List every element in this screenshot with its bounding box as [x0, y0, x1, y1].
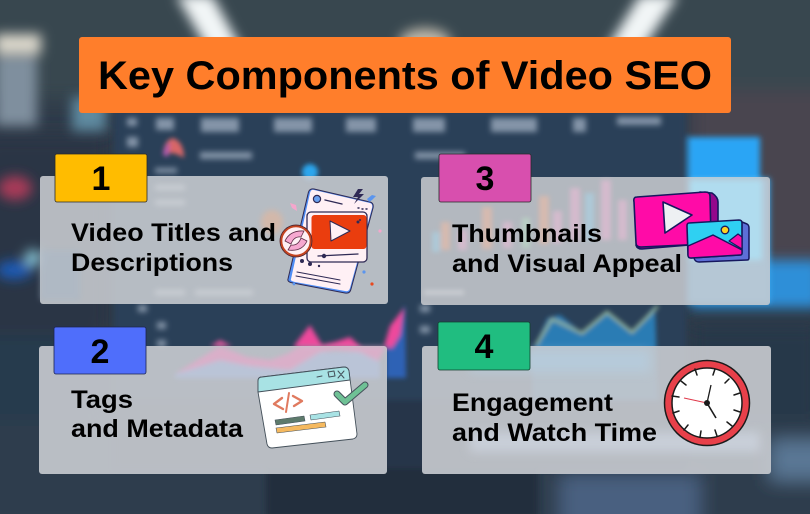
badge 1: 1 — [92, 160, 110, 198]
badge 2 — [54, 327, 146, 374]
text: card 4 heading: and Watch Time — [452, 419, 657, 447]
text: card 3 heading: and Visual Appeal — [452, 250, 682, 278]
text: card 1 heading — [71, 219, 276, 277]
icon: code window with check mark — [258, 367, 365, 448]
badge 3: 3 — [476, 160, 494, 198]
badge 4: 4 — [475, 328, 494, 366]
panel: card 1 — [40, 176, 388, 304]
icon: video post with play button — [280, 189, 382, 293]
text: card 4 heading: Engagement — [452, 389, 614, 417]
text: card 4 heading — [452, 389, 657, 447]
text: card 2 heading — [71, 386, 244, 443]
text: card 2 heading: and Metadata — [71, 415, 244, 443]
badge 1 — [55, 154, 147, 202]
panel: card 3 — [421, 177, 770, 305]
panel: card 2 — [39, 346, 387, 474]
badge 3 — [439, 154, 531, 202]
text: card 3 heading — [452, 220, 682, 278]
panel: card 4 — [422, 346, 771, 474]
icon: clock — [664, 360, 750, 446]
badge 4 — [438, 322, 530, 370]
text: card 3 heading: Thumbnails — [452, 220, 602, 248]
text: card 1 heading: Descriptions — [71, 249, 233, 277]
text: card 2 heading: Tags — [71, 386, 133, 414]
badge 2: 2 — [91, 333, 109, 371]
icon: thumbnails — [634, 192, 749, 262]
panel: title banner — [79, 37, 731, 113]
text: card 1 heading: Video Titles and — [71, 219, 276, 247]
title: Key Components of Video SEO — [98, 54, 712, 98]
